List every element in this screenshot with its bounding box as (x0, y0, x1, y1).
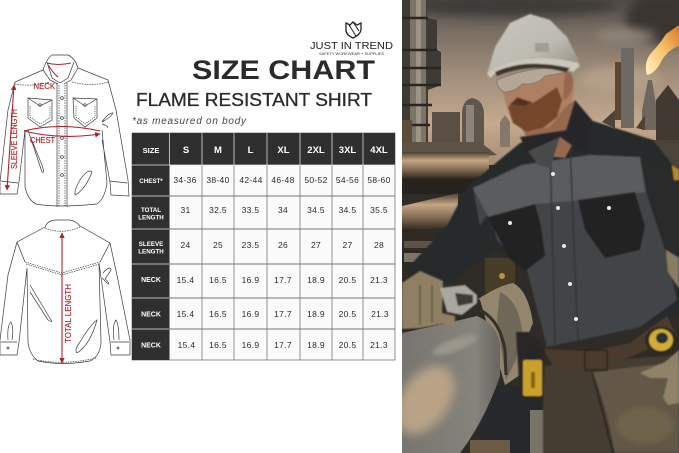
header row: L (248, 145, 254, 156)
neck values row 3: 17.7 (274, 340, 292, 350)
total length values: 35.5 (370, 205, 388, 215)
refinery background (400, 0, 679, 453)
label: neck: NECK (34, 82, 56, 91)
header row: SIZE (143, 146, 159, 155)
big pipe (402, 283, 533, 453)
header row: 2XL (307, 145, 325, 156)
neck values row 2 (177, 309, 389, 319)
row labels: NECK (141, 312, 161, 318)
pants (543, 355, 679, 453)
chest values (173, 175, 391, 185)
neck values row 2: 21.3 (371, 309, 389, 319)
sleeve length values (180, 240, 384, 250)
chest values: 38-40 (206, 175, 230, 185)
sleeve length values: 26 (278, 240, 288, 250)
header row: M (214, 145, 222, 156)
total length values: 31 (180, 205, 191, 215)
sleeve length values: 27 (311, 240, 321, 250)
row labels: NECK (141, 277, 161, 284)
neck values row 3 (178, 340, 388, 350)
row labels: TOTAL (141, 207, 161, 214)
neck and collar (520, 100, 592, 168)
neck values row 1: 18.9 (307, 275, 325, 285)
header row: XL (277, 145, 290, 156)
total length values: 32.5 (209, 205, 227, 215)
neck values row 2: 18.9 (307, 309, 325, 319)
hard hat (487, 14, 580, 78)
sleeve length values: 28 (374, 240, 384, 250)
shirt (404, 120, 679, 347)
row labels: CHEST* (139, 178, 163, 185)
neck values row 1 (177, 275, 388, 285)
neck values row 2: 17.7 (274, 309, 292, 319)
neck values row 1: 17.7 (274, 275, 292, 285)
neck values row 2: 16.9 (242, 309, 259, 319)
photo: worker at refinery (384, 0, 679, 453)
sleeve length values: 25 (213, 240, 223, 250)
chest values: 42-44 (239, 175, 263, 185)
sleeve length arrow (7, 85, 14, 190)
neck values row 3: 16.5 (209, 340, 227, 350)
neck values row 2: 20.5 (339, 309, 356, 319)
total length values (180, 205, 388, 215)
row labels: NECK (141, 342, 161, 350)
neck values row 1: 15.4 (177, 275, 194, 285)
total length values: 33.5 (242, 205, 259, 215)
note: *as measured on body (132, 116, 247, 127)
neck values row 1: 20.5 (339, 275, 356, 285)
chest values: 54-56 (336, 175, 359, 185)
neck values row 3: 18.9 (307, 340, 325, 350)
header row: 3XL (339, 145, 356, 156)
face and beard (500, 63, 574, 132)
safety glasses (497, 68, 566, 92)
sleeve length values: 24 (180, 240, 191, 250)
row labels: LENGTH (138, 248, 164, 256)
sleeve length values: 23.5 (242, 240, 259, 250)
shirt back diagram (0, 220, 130, 364)
tool belt (543, 316, 677, 372)
neck values row 1: 21.3 (370, 275, 388, 285)
total length values: 34.5 (307, 205, 325, 215)
title: SIZE CHART (192, 55, 376, 85)
neck values row 1: 16.5 (209, 275, 227, 285)
neck values row 3: 16.9 (242, 340, 259, 350)
sleeve length values: 27 (342, 240, 353, 250)
subtitle: FLAME RESISTANT SHIRT (136, 90, 372, 110)
table cells (132, 133, 395, 360)
neck measure arc (47, 63, 71, 77)
header row: S (183, 145, 189, 156)
brand logo (310, 22, 393, 56)
size table (132, 133, 395, 360)
right gloved hand (640, 350, 679, 405)
total length arrow (61, 233, 63, 363)
shirt back outline (0, 220, 130, 364)
shirt buttons (508, 172, 611, 321)
neck values row 3: 20.5 (339, 340, 356, 350)
total length values: 34.5 (339, 205, 356, 215)
chest values: 46-48 (271, 175, 295, 185)
neck values row 2: 15.4 (177, 309, 194, 319)
row labels: SLEEVE (139, 241, 163, 248)
chest values: 50-52 (304, 175, 328, 185)
shirt front diagram (0, 55, 129, 207)
header row: 4XL (370, 145, 388, 156)
total length values: 34 (278, 205, 288, 215)
placket buttons (61, 97, 63, 176)
row labels: LENGTH (138, 214, 164, 222)
chest measure arrows (24, 126, 100, 136)
neck values row 3: 15.4 (178, 340, 195, 350)
header row (143, 145, 388, 156)
brand name: JUST IN TREND (310, 41, 393, 52)
belt gauge (645, 327, 677, 353)
label: total length: TOTAL LENGTH (64, 284, 73, 343)
neck values row 2: 16.5 (209, 309, 227, 319)
chest values: 34-36 (173, 175, 197, 185)
label: sleeve length: SLEEVE LENGTH (10, 109, 19, 169)
yellow gas detector (516, 332, 545, 400)
neck values row 3: 21.3 (370, 340, 388, 350)
icon: shield (346, 22, 361, 38)
shirt front outline (0, 55, 129, 207)
chest values: 58-60 (367, 175, 391, 185)
chest pockets (28, 98, 97, 127)
brand tagline: SAFETY WORKWEAR + SUPPLIES (319, 52, 385, 56)
neck values row 1: 16.9 (242, 275, 259, 285)
gloved hand on wrench (402, 271, 477, 329)
row labels (138, 178, 164, 350)
label: chest: CHEST (30, 136, 55, 145)
